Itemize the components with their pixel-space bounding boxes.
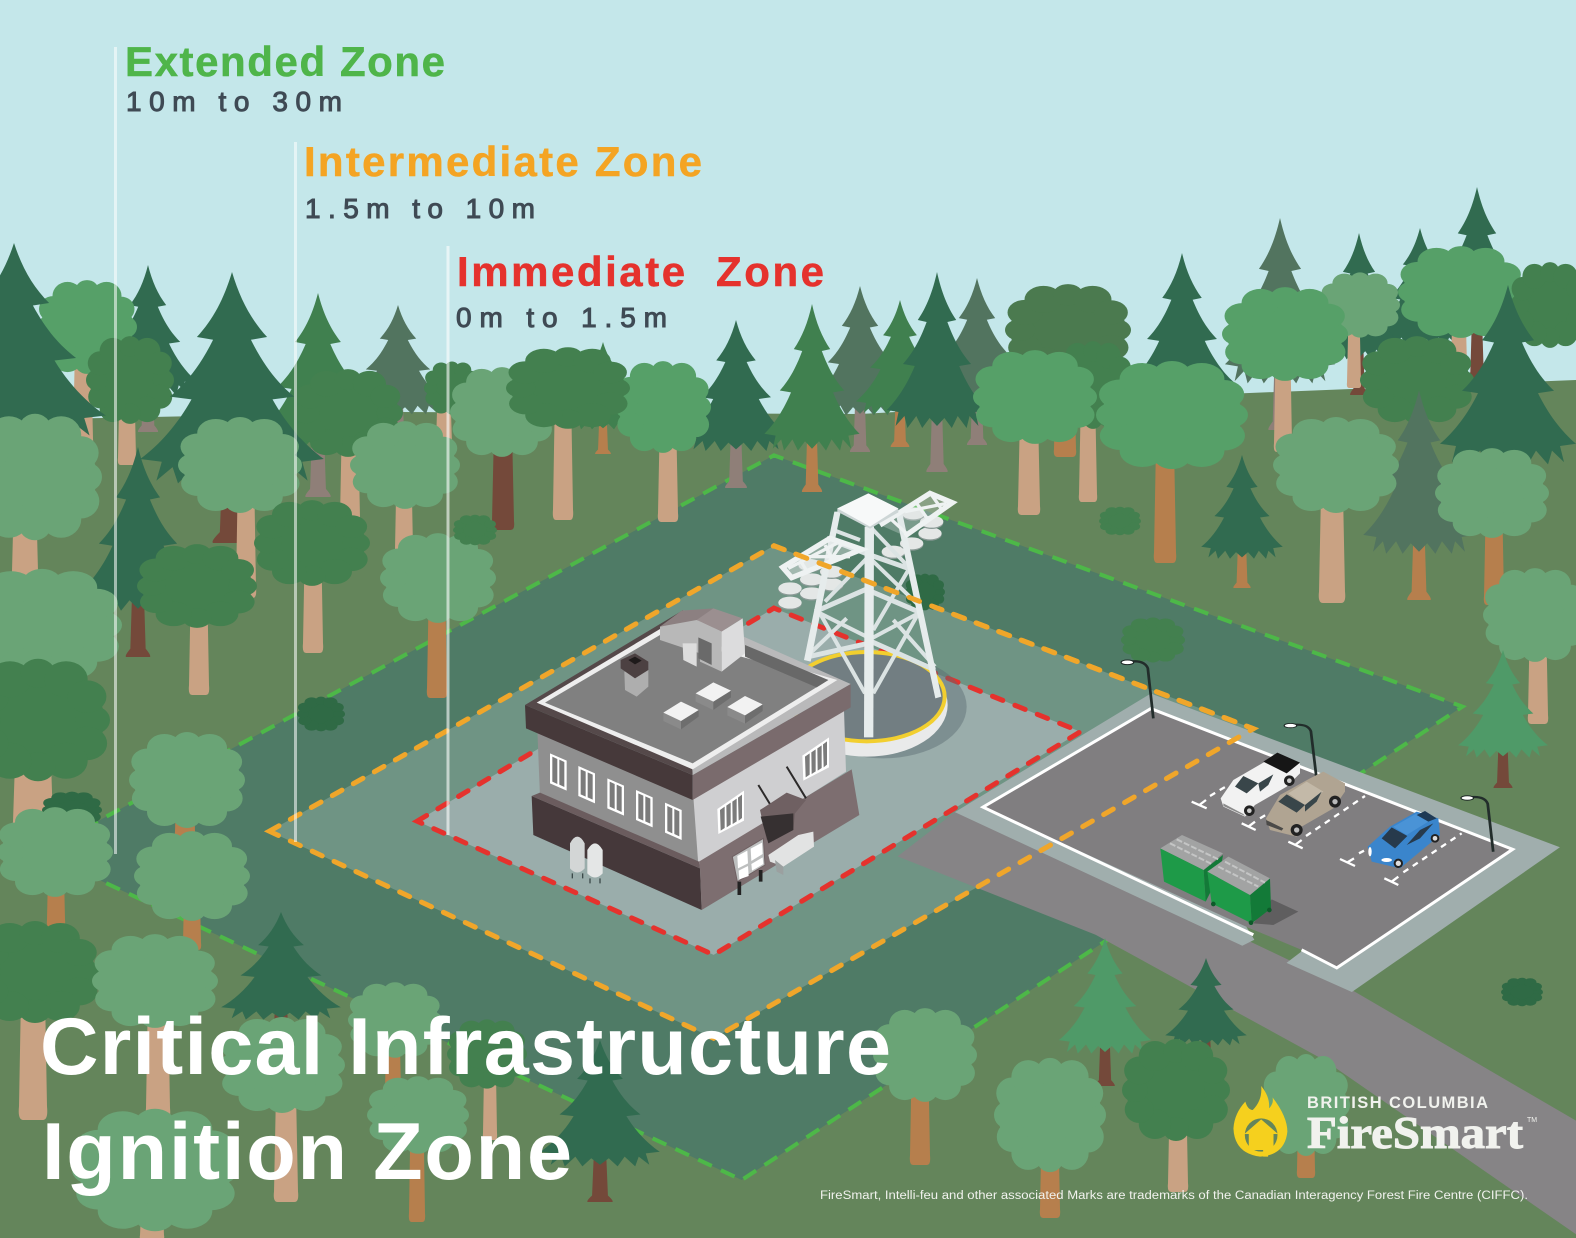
zone marker line: extended xyxy=(114,47,117,854)
intermediate zone dashed boundary xyxy=(269,546,1253,1038)
blue car xyxy=(1368,811,1440,868)
heading: immediate zone: Immediate Zone xyxy=(457,248,824,295)
trademark note: FireSmart, Intelli-feu and other associated Marks are trademarks of the Canadian Interagency Forest Fire Centre (CIFFC). xyxy=(820,1190,1528,1202)
subheading: immediate zone range: 0m to 1.5m xyxy=(456,302,667,333)
rooftop penthouse xyxy=(660,608,745,672)
foreground forest xyxy=(0,732,1350,1238)
upper wall right face xyxy=(693,710,846,865)
white pickup truck xyxy=(1221,753,1300,817)
parking lot asphalt xyxy=(983,709,1513,968)
back broadleaf trees xyxy=(37,246,1576,465)
logo wordmark: BRITISH COLUMBIA xyxy=(1307,1094,1488,1112)
entry door xyxy=(732,838,765,895)
tower right arm xyxy=(880,493,952,536)
roof top edge left xyxy=(525,610,700,775)
main title: Ignition Zone xyxy=(42,1107,572,1197)
base left trim xyxy=(532,793,700,868)
middle pine trees xyxy=(140,272,1576,543)
logo: BC FireSmart xyxy=(1233,1086,1537,1158)
entry stairs and canopy xyxy=(758,767,814,875)
roof top edge right xyxy=(683,610,851,775)
base left face xyxy=(532,796,702,910)
left windows xyxy=(550,753,682,840)
chimney xyxy=(621,653,648,697)
dumpster shadow xyxy=(1253,899,1298,925)
roof fascia right xyxy=(693,684,851,800)
back forest xyxy=(0,187,1576,1006)
roof white trim xyxy=(537,629,837,769)
roof deck xyxy=(545,635,828,763)
zone marker line: intermediate xyxy=(294,142,297,842)
extended zone dashed boundary xyxy=(40,455,1462,1180)
ground xyxy=(0,380,1576,1238)
base right face xyxy=(699,769,859,910)
parking bay markers xyxy=(1192,786,1462,885)
logo: BC FireSmart: TM xyxy=(1527,1117,1537,1124)
roof skylights xyxy=(663,682,763,729)
green dumpster left xyxy=(1160,835,1223,902)
main title xyxy=(40,1002,891,1197)
parapet shading xyxy=(745,645,828,687)
street lamps xyxy=(1121,660,1493,852)
heading: extended zone: Extended Zone xyxy=(125,38,445,85)
right windows xyxy=(717,737,829,834)
road xyxy=(898,812,1576,1234)
tower legs xyxy=(804,512,941,737)
back pine trees xyxy=(100,187,1527,454)
tower platform xyxy=(837,493,898,529)
circular tower pad xyxy=(786,650,967,758)
parking lot curb xyxy=(955,694,1560,992)
middle broadleaf trees xyxy=(0,341,1248,598)
right forest trees xyxy=(1201,390,1576,788)
tower left arm xyxy=(783,538,862,578)
parking lot lines xyxy=(983,709,1513,968)
heading: intermediate zone: Intermediate Zone xyxy=(304,138,702,185)
main title: Critical Infrastructure xyxy=(40,1002,891,1092)
left forest trees xyxy=(0,447,496,832)
zone marker line: immediate xyxy=(446,246,450,835)
zone map: ignition zone areas and road xyxy=(40,455,1576,1234)
foreground left trees xyxy=(0,732,341,1120)
icon: flame with house xyxy=(1233,1086,1287,1157)
intermediate zone area xyxy=(269,546,1253,1038)
building xyxy=(525,608,859,910)
communication tower xyxy=(778,493,952,737)
subheading: intermediate zone range: 1.5m to 10m xyxy=(305,193,535,224)
immediate zone dashed boundary xyxy=(417,608,1080,955)
immediate zone area xyxy=(417,608,1080,955)
shrubs xyxy=(42,507,1543,1006)
extended zone area xyxy=(40,455,1462,1180)
tan pickup truck xyxy=(1266,772,1345,837)
gas tanks xyxy=(570,837,603,883)
lattice bracing xyxy=(808,527,935,693)
left tall pine xyxy=(0,243,106,493)
upper wall left face xyxy=(537,730,699,865)
parking lot items xyxy=(1160,753,1462,925)
green dumpster right xyxy=(1207,857,1272,925)
logo: BC FireSmart: FireSmart xyxy=(1307,1107,1524,1158)
subheading: extended zone range: 10m to 30m xyxy=(126,86,342,117)
intermediate dashed line crossing tower xyxy=(774,546,1253,729)
foreground middle trees xyxy=(72,982,660,1238)
roof fascia left xyxy=(525,705,693,800)
satellite dishes xyxy=(778,507,943,610)
foreground right trees xyxy=(873,938,1350,1218)
